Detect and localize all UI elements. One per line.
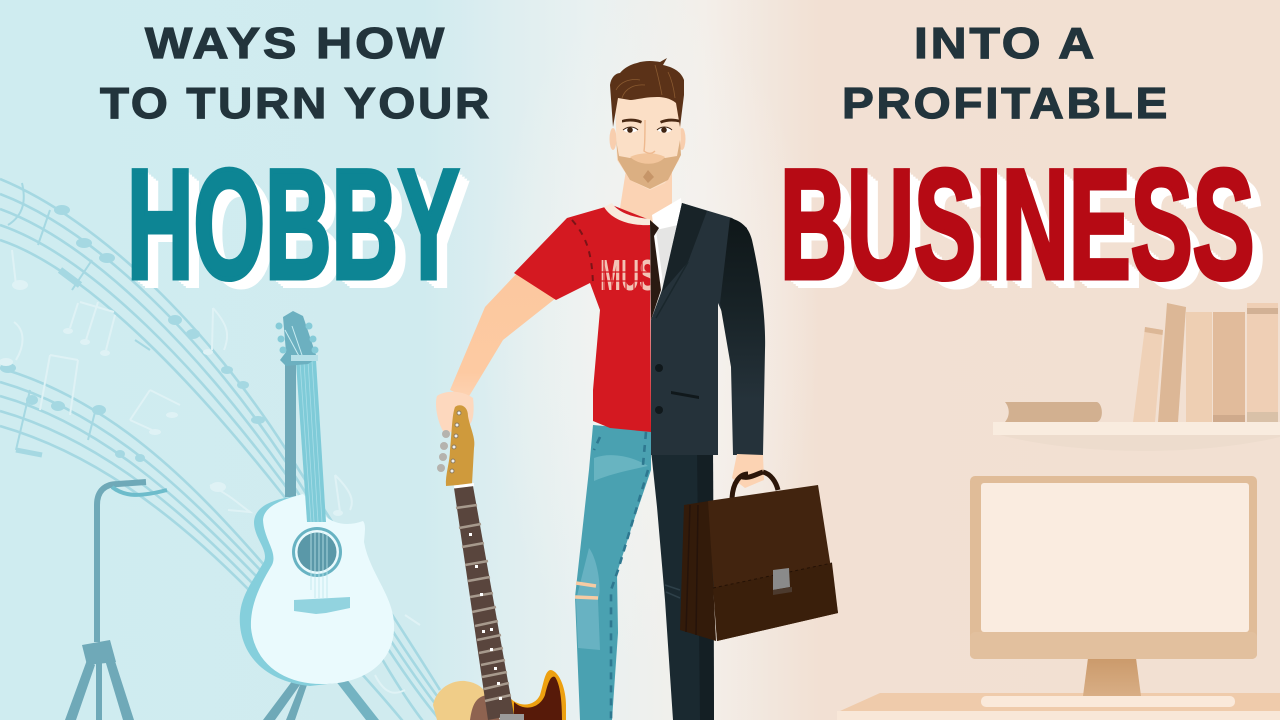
tuning pegs [276,322,318,354]
desk [837,693,1280,720]
jacket sleeve [720,218,765,455]
neck [620,170,672,225]
upright book [1186,312,1212,422]
headstock [446,405,474,486]
briefcase [680,454,838,641]
heading: hobby: HOBBY [127,138,459,312]
leaning book dark [1158,303,1186,422]
head [610,58,686,190]
top right title: PROFITABLE [842,79,1170,128]
red t-shirt [514,205,651,432]
shirt print: MUS [600,251,656,300]
jacket buttons and pocket [655,364,699,414]
beard [616,140,681,189]
guitar body left [433,681,495,720]
staff note heads [0,205,265,462]
top left title: TO TURN YOUR [100,79,492,128]
jeans details [575,432,648,720]
top right title: INTO A [914,19,1097,68]
guitar body [251,494,394,684]
leaning book [1133,327,1163,422]
jacket [651,203,747,455]
inlays [469,533,502,700]
monitor [970,476,1257,707]
arm [450,270,556,398]
heading: business: BUSINESS [780,138,1255,312]
shirt collar [604,203,650,225]
white dress shirt [652,198,682,285]
handle [732,472,778,498]
tie [650,220,661,320]
shirt seam [572,220,593,285]
shirt print [600,251,656,300]
shelf shadow [1000,435,1280,451]
bridge [294,597,350,614]
guitar stand [263,362,379,720]
guitar body right [510,670,566,720]
pegs [437,430,450,472]
face [615,95,681,190]
upright book end [1247,303,1278,422]
acoustic guitar [240,311,394,686]
frets [456,505,511,701]
hair [610,58,684,127]
hand on guitar [436,392,474,434]
lapel edge [656,262,688,318]
top left title: WAYS HOW [145,19,447,68]
nose [644,120,655,153]
pickup [500,714,524,720]
case body [708,485,838,641]
neck [454,486,514,720]
jacket shoulder shading [662,203,707,292]
top left title [100,19,492,128]
electric guitar [433,405,566,720]
jeans [575,425,651,720]
holding hand [732,454,764,488]
eyebrows [622,119,680,124]
case lower panel [713,563,838,641]
man [436,58,765,720]
bookshelf [993,303,1280,451]
staff note stems [8,183,150,455]
ears [610,128,616,150]
upright book dark [1213,312,1245,422]
eyes [623,127,672,133]
shelf [993,422,1280,435]
microphone stand [65,482,167,720]
case gusset [680,501,716,641]
dress trousers [651,450,714,720]
music staffs and notes [0,179,440,720]
guitar headstock [280,311,317,366]
guitar neck [296,360,326,522]
flat book [1005,402,1102,422]
faint notes [0,250,420,693]
top right title [842,19,1170,128]
guitar body back edge [240,495,345,686]
clasp [773,568,790,590]
sound hole [292,527,342,577]
